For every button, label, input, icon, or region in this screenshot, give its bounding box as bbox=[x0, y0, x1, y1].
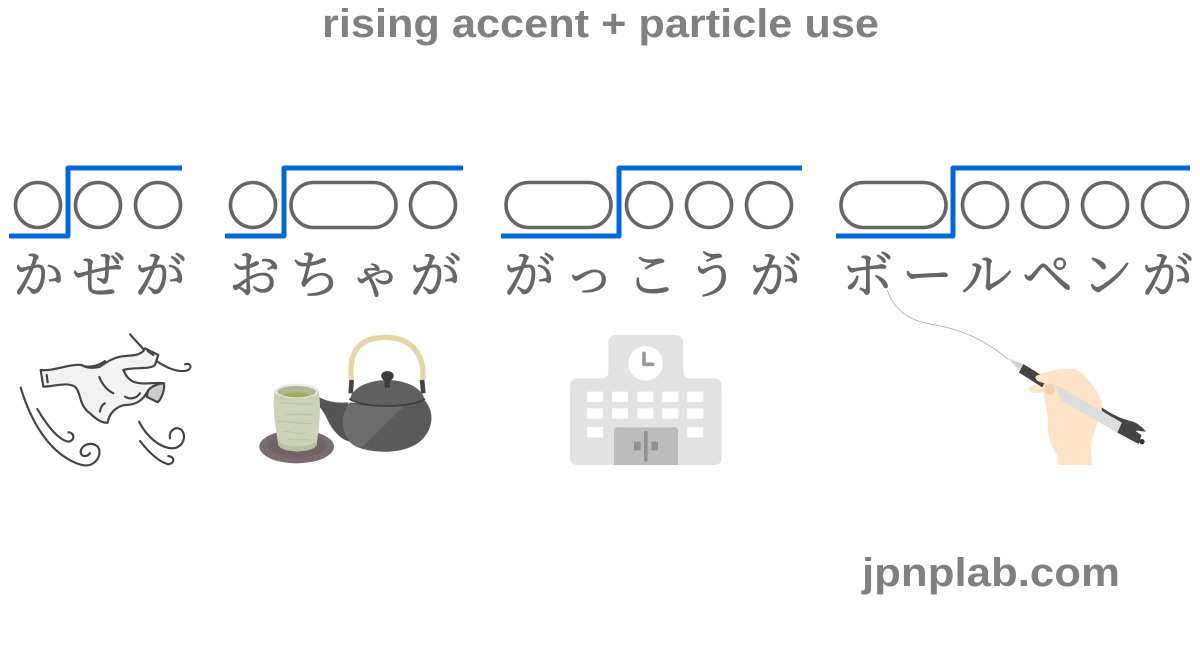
word group: boorupen ga bbox=[836, 168, 1193, 305]
cup bbox=[274, 385, 320, 451]
title: rising accent + particle use bbox=[322, 2, 879, 46]
pen barrel bbox=[1053, 383, 1122, 433]
pen clip bbox=[1102, 407, 1146, 437]
icon: cloth blowing in the wind bbox=[21, 334, 190, 465]
pitch line: gakkou ga bbox=[501, 168, 802, 236]
word group: kaze ga bbox=[9, 168, 186, 305]
icon: school building bbox=[570, 335, 722, 465]
pitch line: kaze ga bbox=[9, 168, 182, 236]
mora shapes: boorupen ga bbox=[841, 182, 1188, 228]
pot body bbox=[343, 399, 431, 452]
word group: ocha ga bbox=[225, 168, 463, 305]
pen trace line bbox=[887, 290, 1008, 359]
pen grip bbox=[1019, 364, 1047, 387]
thumb and finger bbox=[1035, 374, 1054, 384]
kana: kaze ga: かぜが bbox=[13, 249, 186, 305]
spout bbox=[318, 397, 350, 442]
clock bbox=[628, 346, 663, 381]
mora shapes: ocha ga bbox=[230, 182, 456, 228]
knob bbox=[381, 371, 394, 388]
kana: ocha ga: おちゃが bbox=[229, 249, 461, 305]
handle bbox=[351, 337, 423, 380]
pen end bbox=[1117, 423, 1142, 444]
hand back bbox=[1037, 369, 1102, 465]
lid bbox=[350, 380, 424, 406]
pen tip bbox=[1008, 359, 1023, 371]
pitch line: boorupen ga bbox=[836, 168, 1190, 236]
mora shapes: gakkou ga bbox=[506, 182, 792, 228]
pitch line: ocha ga bbox=[225, 168, 463, 236]
door bbox=[614, 427, 678, 465]
mora circles: kaze ga bbox=[16, 182, 180, 228]
kana: gakkou ga: がっこうが bbox=[504, 249, 801, 305]
kana: boorupen ga: ボールペンが bbox=[842, 249, 1193, 305]
windows bbox=[587, 392, 703, 437]
icon: hand holding pen bbox=[887, 290, 1146, 465]
credit: jpnplab.com: jpnplab.com bbox=[861, 551, 1120, 595]
saucer bbox=[259, 430, 334, 463]
word group: gakkou ga bbox=[501, 168, 802, 305]
icon: green tea cup and iron teapot bbox=[259, 337, 431, 463]
